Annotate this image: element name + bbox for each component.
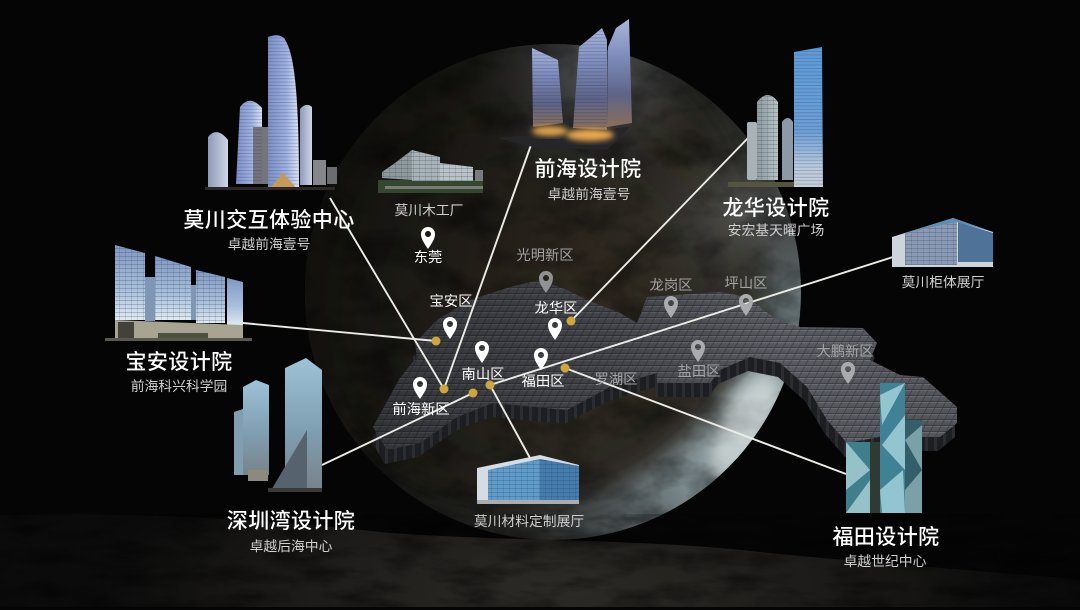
building: 莫川交互体验中心 towers: [205, 35, 337, 190]
district labels: 前海新区: [392, 401, 450, 418]
district labels: 盐田区: [678, 363, 720, 380]
heading: 莫川交互体验中心: [183, 209, 355, 252]
heading: 深圳湾设计院: 深圳湾设计院: [227, 510, 355, 533]
district labels: 罗湖区: [595, 371, 637, 388]
heading: 前海设计院: 卓越前海壹号: [548, 186, 630, 202]
Shenzhen pixel map: [371, 280, 957, 464]
building: 前海设计院 towers: [497, 19, 632, 150]
district labels: [392, 247, 874, 418]
building: 宝安设计院 towers: [105, 245, 252, 341]
building: 龙华设计院 towers: [728, 47, 823, 187]
district labels: 光明新区: [516, 247, 574, 264]
heading: 莫川木工厂: 莫川木工厂: [395, 203, 463, 218]
building: 莫川材料定制展厅: [477, 455, 579, 504]
heading: 深圳湾设计院: 卓越后海中心: [250, 539, 333, 554]
grey map pins: [539, 271, 855, 384]
building: 莫川木工厂: [378, 150, 483, 193]
heading: 莫川交互体验中心: 莫川交互体验中心: [183, 209, 355, 232]
location dots: [432, 316, 576, 398]
district labels: 龙华区: [535, 300, 577, 317]
heading: 龙华设计院: 安宏基天曜广场: [728, 222, 824, 238]
heading: 福田设计院: 福田设计院: [832, 526, 940, 549]
heading: 福田设计院: [832, 526, 940, 569]
district labels: 龙岗区: [650, 277, 692, 294]
heading: 莫川交互体验中心: 卓越前海壹号: [228, 236, 310, 252]
white map pins: [413, 227, 562, 399]
district labels: 南山区: [462, 366, 504, 383]
building: 福田设计院 towers: [846, 383, 922, 513]
district labels: 宝安区: [430, 293, 472, 310]
heading: 宝安设计院: 宝安设计院: [126, 351, 232, 374]
district labels: 福田区: [522, 373, 564, 390]
heading: 莫川柜体展厅: 莫川柜体展厅: [902, 275, 985, 290]
moon ground: [0, 514, 1080, 607]
heading: 龙华设计院: [722, 197, 830, 238]
heading: 宝安设计院: 前海科兴科学园: [131, 378, 227, 394]
heading: 深圳湾设计院: [227, 510, 355, 554]
building: 莫川柜体展厅: [892, 218, 993, 267]
heading: 龙华设计院: 龙华设计院: [722, 197, 830, 220]
globe: [305, 44, 801, 540]
district labels: 东莞: [414, 249, 442, 266]
heading: 福田设计院: 卓越世纪中心: [844, 554, 927, 569]
heading: 宝安设计院: [126, 351, 232, 394]
district labels: 大鹏新区: [816, 343, 874, 360]
heading: 前海设计院: [534, 158, 642, 202]
connector lines: [243, 138, 893, 474]
building: 深圳湾设计院 towers: [234, 358, 322, 492]
heading: 莫川材料定制展厅: 莫川材料定制展厅: [474, 514, 584, 529]
heading: 前海设计院: 前海设计院: [534, 158, 642, 181]
district labels: 坪山区: [725, 275, 767, 292]
